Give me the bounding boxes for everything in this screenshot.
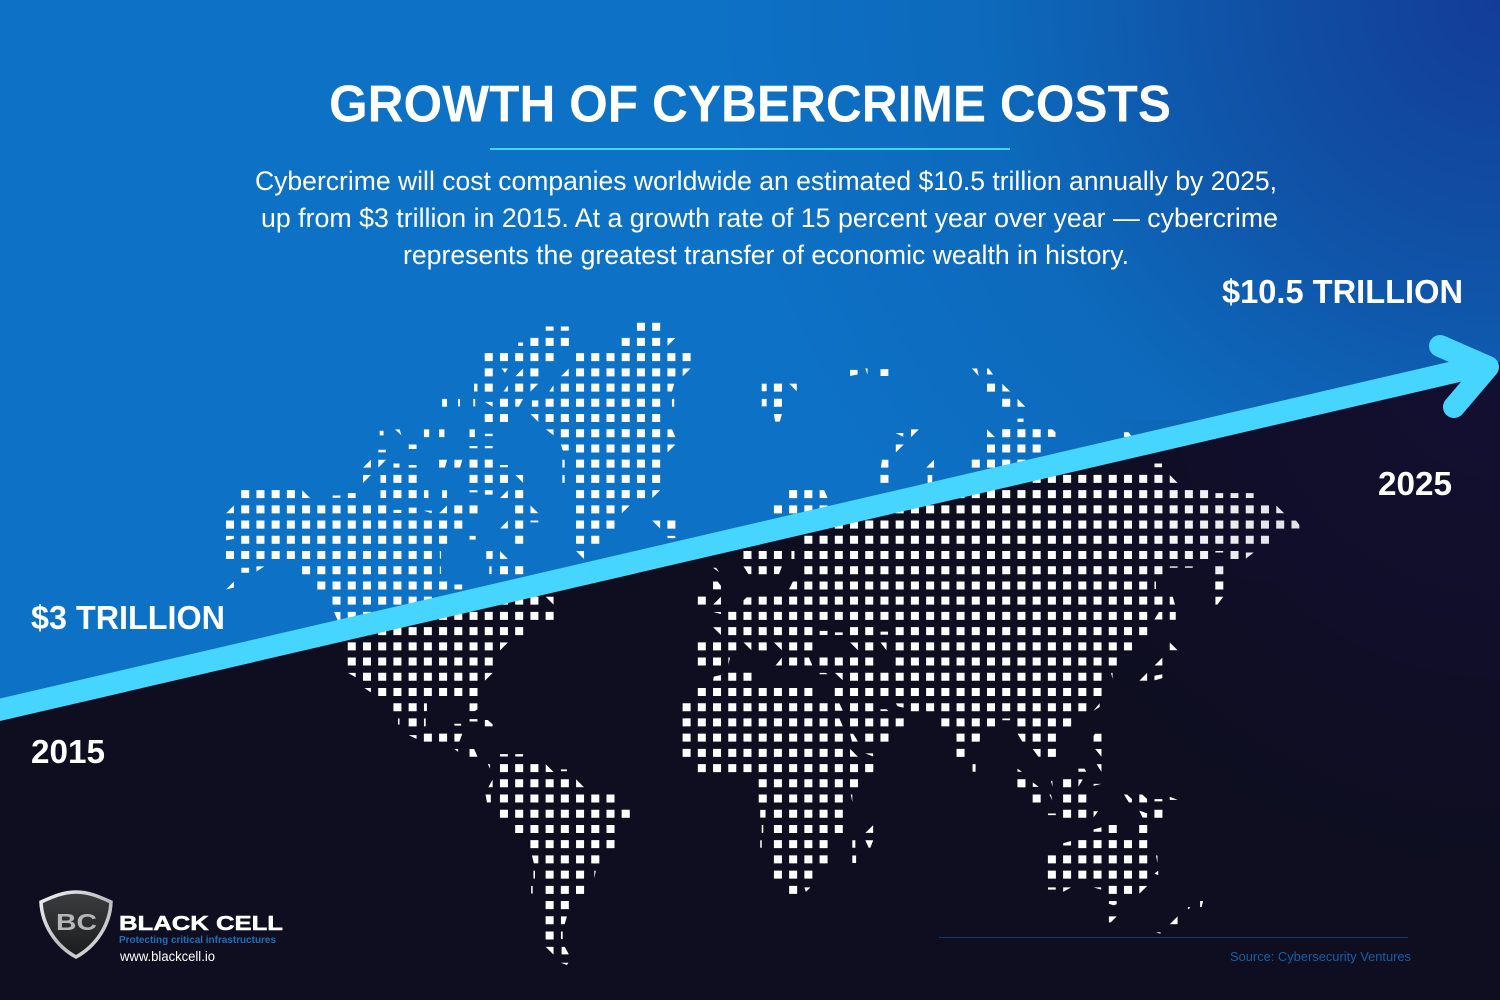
intro paragraph: up from $3 trillion in 2015. At a growth rate of 15 percent year over year — cybercrime: [261, 203, 1278, 233]
label: $3 trillion: $3 TRILLION: [31, 599, 225, 636]
logo tagline: Protecting critical infrastructures: [119, 935, 276, 946]
source: Source: Cybersecurity Ventures: [1230, 949, 1411, 964]
source rule: [939, 937, 1408, 938]
label: $10.5 trillion: $10.5 TRILLION: [1222, 273, 1463, 310]
logo: Black Cell: [41, 892, 283, 964]
logo wordmark: BLACK CELL: [119, 912, 283, 935]
background: dark lower area: [0, 362, 1500, 1000]
intro paragraph: represents the greatest transfer of economic wealth in history.: [403, 240, 1129, 270]
title underline: [490, 148, 1010, 150]
intro paragraph: [255, 166, 1278, 270]
label: 2025: 2025: [1378, 465, 1452, 502]
growth arrow: [0, 346, 1488, 714]
dotted world map: [226, 327, 1299, 965]
title: GROWTH OF CYBERCRIME COSTS: [329, 74, 1171, 132]
icon: shield: [41, 892, 111, 957]
label: 2015: 2015: [31, 733, 105, 770]
icon: shield: BC: [56, 909, 97, 935]
logo url: www.blackcell.io: [119, 949, 215, 964]
intro paragraph: Cybercrime will cost companies worldwide an estimated $10.5 trillion annually by 2025,: [255, 166, 1277, 196]
